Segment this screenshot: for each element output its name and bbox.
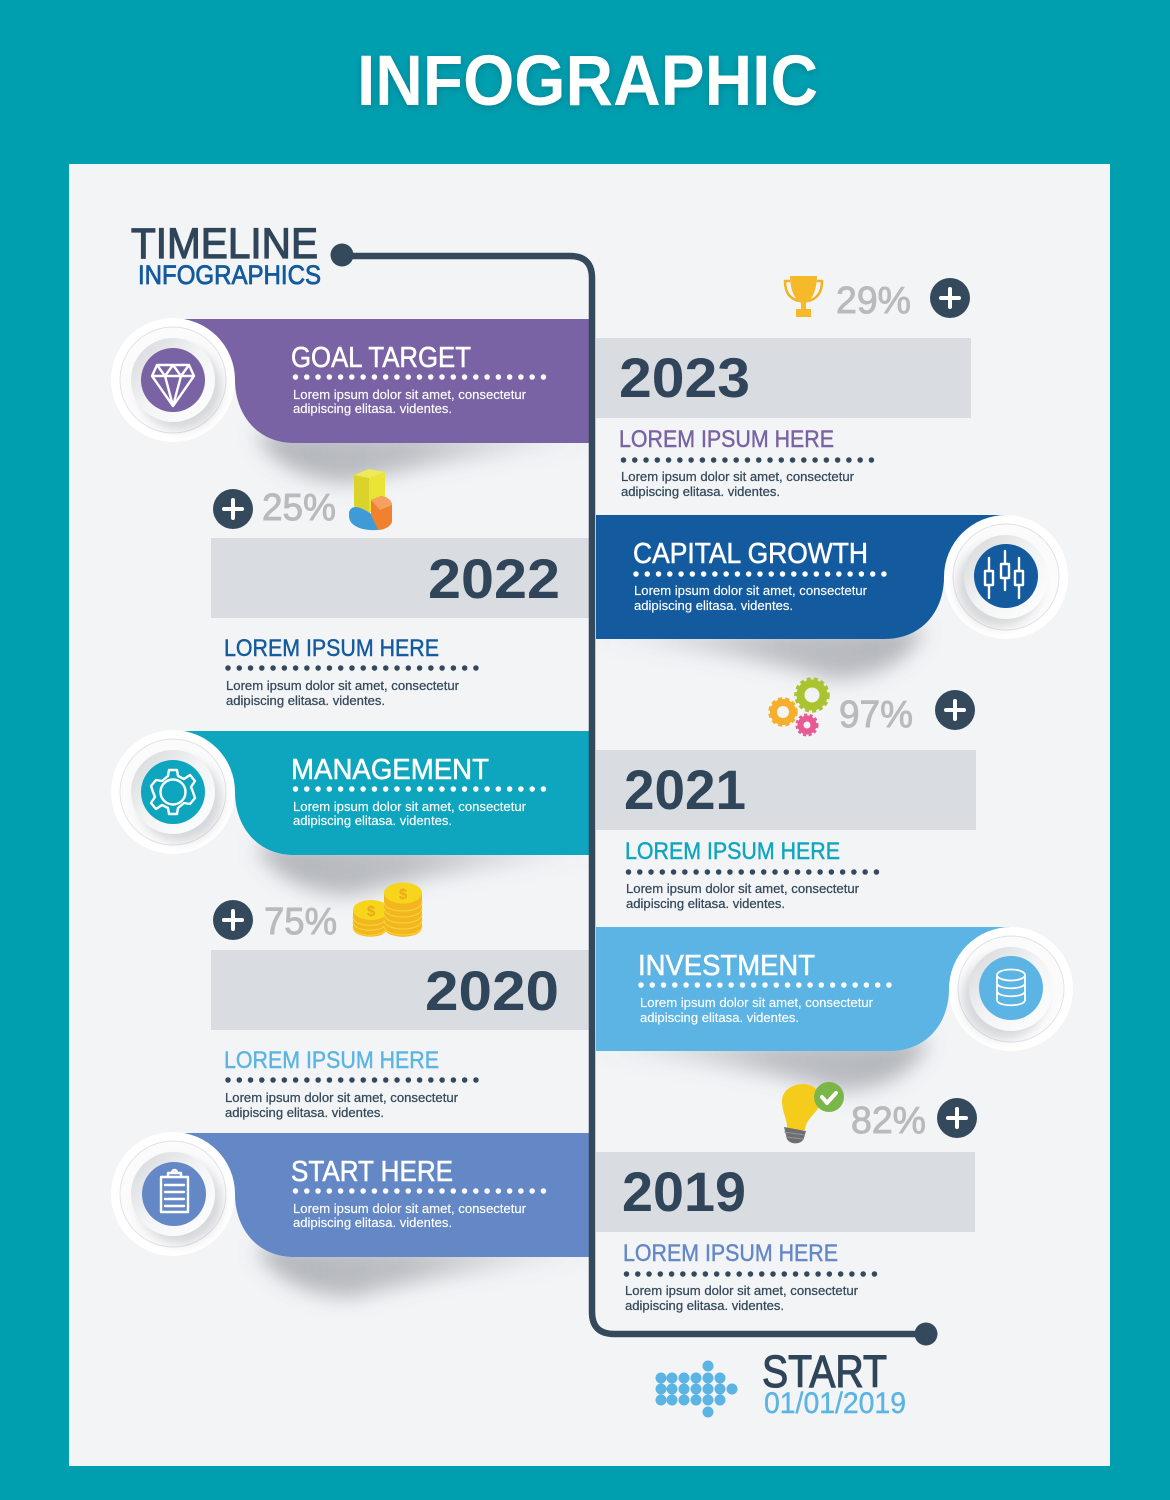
- icon: light bulb with check: [782, 1082, 844, 1143]
- panel: main sheet: [69, 164, 1110, 1466]
- body text: adipiscing elitasa. videntes.: [293, 1215, 452, 1230]
- heading: timeline infographics: TIMELINE: [131, 220, 318, 268]
- band: [175, 731, 589, 855]
- icon: database badge: [949, 927, 1073, 1051]
- start label: [762, 1346, 906, 1420]
- body text: [293, 799, 527, 828]
- year block: 2019: Lorem ipsum dolor sit amet, consectetur: [625, 1283, 859, 1298]
- title text: GOAL TARGET: [291, 342, 471, 374]
- year block: 2019: 2019: [622, 1160, 746, 1223]
- year block: 2021: LOREM IPSUM HERE: [625, 838, 840, 865]
- body text: [293, 387, 527, 416]
- body text: Lorem ipsum dolor sit amet, consectetur: [640, 995, 874, 1010]
- icon: plus: [937, 1098, 977, 1138]
- start label: START: [762, 1346, 887, 1397]
- band shadow: [255, 844, 590, 896]
- year block: 2023: adipiscing elitasa. videntes.: [621, 484, 780, 499]
- body text: adipiscing elitasa. videntes.: [640, 1010, 799, 1025]
- stat: 29%: 29%: [836, 280, 911, 322]
- body text: Lorem ipsum dolor sit amet, consectetur: [293, 799, 527, 814]
- icon: diamond badge: [111, 318, 235, 442]
- band: [596, 515, 1006, 639]
- body text: Lorem ipsum dolor sit amet, consectetur: [634, 583, 868, 598]
- stat: 75%: [213, 882, 422, 943]
- panel: goal target: [111, 318, 590, 484]
- body text: Lorem ipsum dolor sit amet, consectetur: [293, 1201, 527, 1216]
- stat: 97%: 97%: [839, 694, 913, 736]
- panel: management: [111, 730, 590, 896]
- icon: plus: [930, 278, 970, 318]
- stat: 25%: 25%: [262, 487, 336, 529]
- icon: plus: [213, 900, 253, 940]
- year block: 2020: adipiscing elitasa. videntes.: [225, 1105, 384, 1120]
- panel: capital growth: [596, 515, 1068, 680]
- band shadow: [596, 628, 925, 680]
- band: [175, 319, 589, 443]
- panel: investment: [596, 927, 1073, 1092]
- year block: 2022: LOREM IPSUM HERE: [224, 635, 439, 662]
- stat: 97%: [770, 679, 975, 736]
- body text: [640, 995, 874, 1025]
- body text: adipiscing elitasa. videntes.: [634, 598, 793, 613]
- year block: 2022: 2022: [428, 547, 560, 610]
- stat: 82%: [782, 1082, 977, 1143]
- title: INFOGRAPHIC: [357, 42, 818, 121]
- body text: adipiscing elitasa. videntes.: [293, 813, 452, 828]
- year block: 2020: Lorem ipsum dolor sit amet, consectetur: [225, 1090, 459, 1105]
- year block: 2022: [211, 538, 589, 708]
- icon: gear badge: [111, 730, 235, 854]
- year block: 2023: Lorem ipsum dolor sit amet, consectetur: [621, 469, 855, 484]
- title text: INVESTMENT: [638, 950, 815, 982]
- body text: [634, 583, 868, 613]
- stat: 82%: 82%: [851, 1100, 926, 1142]
- band: [175, 1133, 589, 1257]
- year block: 2021: Lorem ipsum dolor sit amet, consectetur: [626, 881, 860, 896]
- body text: adipiscing elitasa. videntes.: [293, 401, 452, 416]
- year block: 2023: 2023: [619, 346, 750, 409]
- stat: 25%: [213, 469, 392, 530]
- band: [596, 927, 1011, 1051]
- body text: [293, 1201, 527, 1230]
- year block: 2022: adipiscing elitasa. videntes.: [226, 693, 385, 708]
- year block: 2021: 2021: [624, 758, 746, 821]
- year block: 2020: LOREM IPSUM HERE: [224, 1047, 439, 1074]
- year block: 2019: [596, 1152, 975, 1313]
- icon: trophy: [785, 276, 822, 317]
- year block: 2023: LOREM IPSUM HERE: [619, 426, 834, 453]
- panel: start here: [111, 1132, 590, 1298]
- year block: 2019: LOREM IPSUM HERE: [623, 1240, 838, 1267]
- year block: 2020: [211, 950, 589, 1120]
- body text: Lorem ipsum dolor sit amet, consectetur: [293, 387, 527, 402]
- icon: plus: [935, 690, 975, 730]
- year block: 2022: Lorem ipsum dolor sit amet, consectetur: [226, 678, 460, 693]
- icon: clipboard badge: [111, 1132, 235, 1256]
- icon: gears: [770, 679, 828, 735]
- icon: plus: [213, 489, 253, 529]
- icon: coin stacks: $: [367, 903, 376, 920]
- title: INFOGRAPHIC: [357, 44, 818, 123]
- stat: 75%: 75%: [264, 901, 337, 943]
- year block: 2021: [596, 750, 976, 911]
- heading: timeline infographics: INFOGRAPHICS: [138, 260, 321, 290]
- stat: 29%: [785, 276, 970, 322]
- band shadow: [255, 1246, 590, 1298]
- year block: 2020: 2020: [425, 959, 559, 1022]
- band shadow: [255, 432, 590, 484]
- title text: CAPITAL GROWTH: [633, 538, 868, 570]
- icon: coin stacks: $: [399, 886, 408, 903]
- year block: 2019: adipiscing elitasa. videntes.: [625, 1298, 784, 1313]
- band shadow: [596, 1040, 930, 1092]
- timeline line: [330, 244, 938, 1346]
- year block: 2021: adipiscing elitasa. videntes.: [626, 896, 785, 911]
- icon: sliders badge: [944, 515, 1068, 639]
- icon: 3d pie and bar chart: [349, 469, 392, 530]
- heading: timeline infographics: [131, 220, 321, 290]
- start label: 01/01/2019: [764, 1387, 906, 1420]
- title text: MANAGEMENT: [291, 754, 489, 786]
- year block: 2023: [596, 338, 971, 499]
- icon: dotted arrow: [656, 1360, 738, 1418]
- title text: START HERE: [291, 1156, 453, 1188]
- icon: coin stacks: [353, 882, 422, 937]
